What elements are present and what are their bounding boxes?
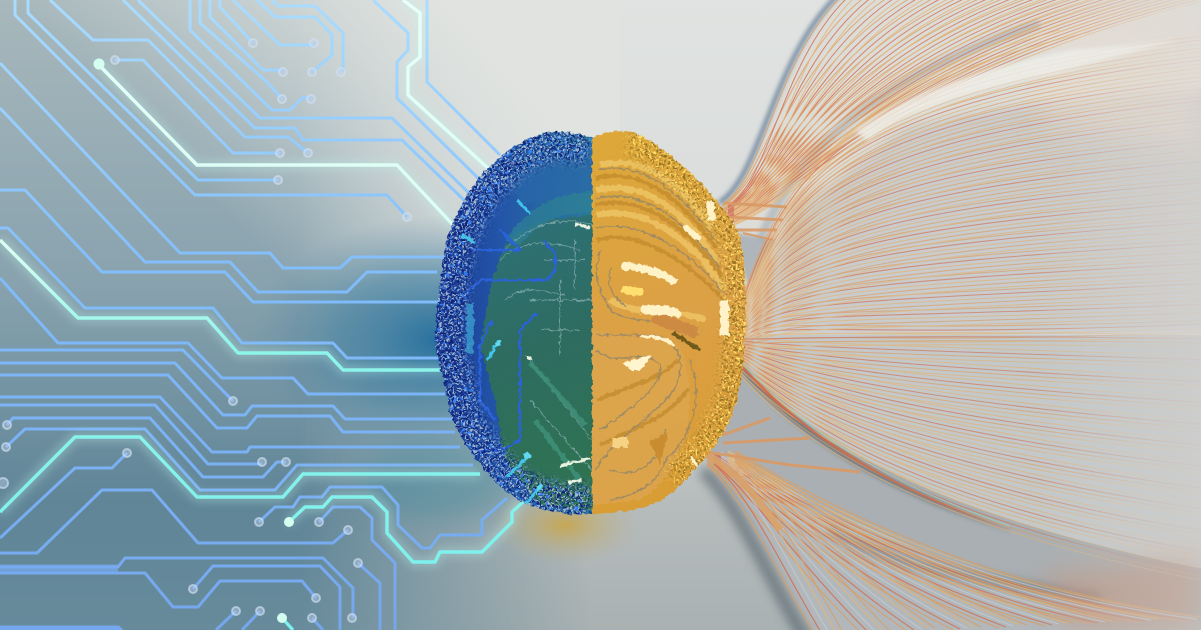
circuit pads [0, 39, 411, 622]
circuit traces: glow [0, 0, 523, 562]
wires: lower fan [707, 358, 1201, 630]
highlight gap between upper and middle fans [855, 40, 1180, 140]
left circuit hemisphere in blue glass [434, 130, 594, 516]
bright pads [94, 58, 294, 623]
wires: middle fan [738, 28, 1201, 582]
circuit traces: bright [0, 0, 523, 630]
brain [434, 130, 747, 516]
wire bundle: backing shapes and shadows [703, 0, 1201, 630]
speckled crystalline rim, amber [622, 132, 747, 486]
circuit traces: regular [0, 0, 507, 630]
wires: short connector bundles near the brain [707, 203, 860, 530]
wires: upper fan [722, 0, 1201, 225]
speckled crystalline rim, blue [434, 130, 593, 516]
haze over right edge [1040, 0, 1201, 630]
background [0, 0, 812, 630]
right hemisphere in amber glass [590, 130, 747, 514]
